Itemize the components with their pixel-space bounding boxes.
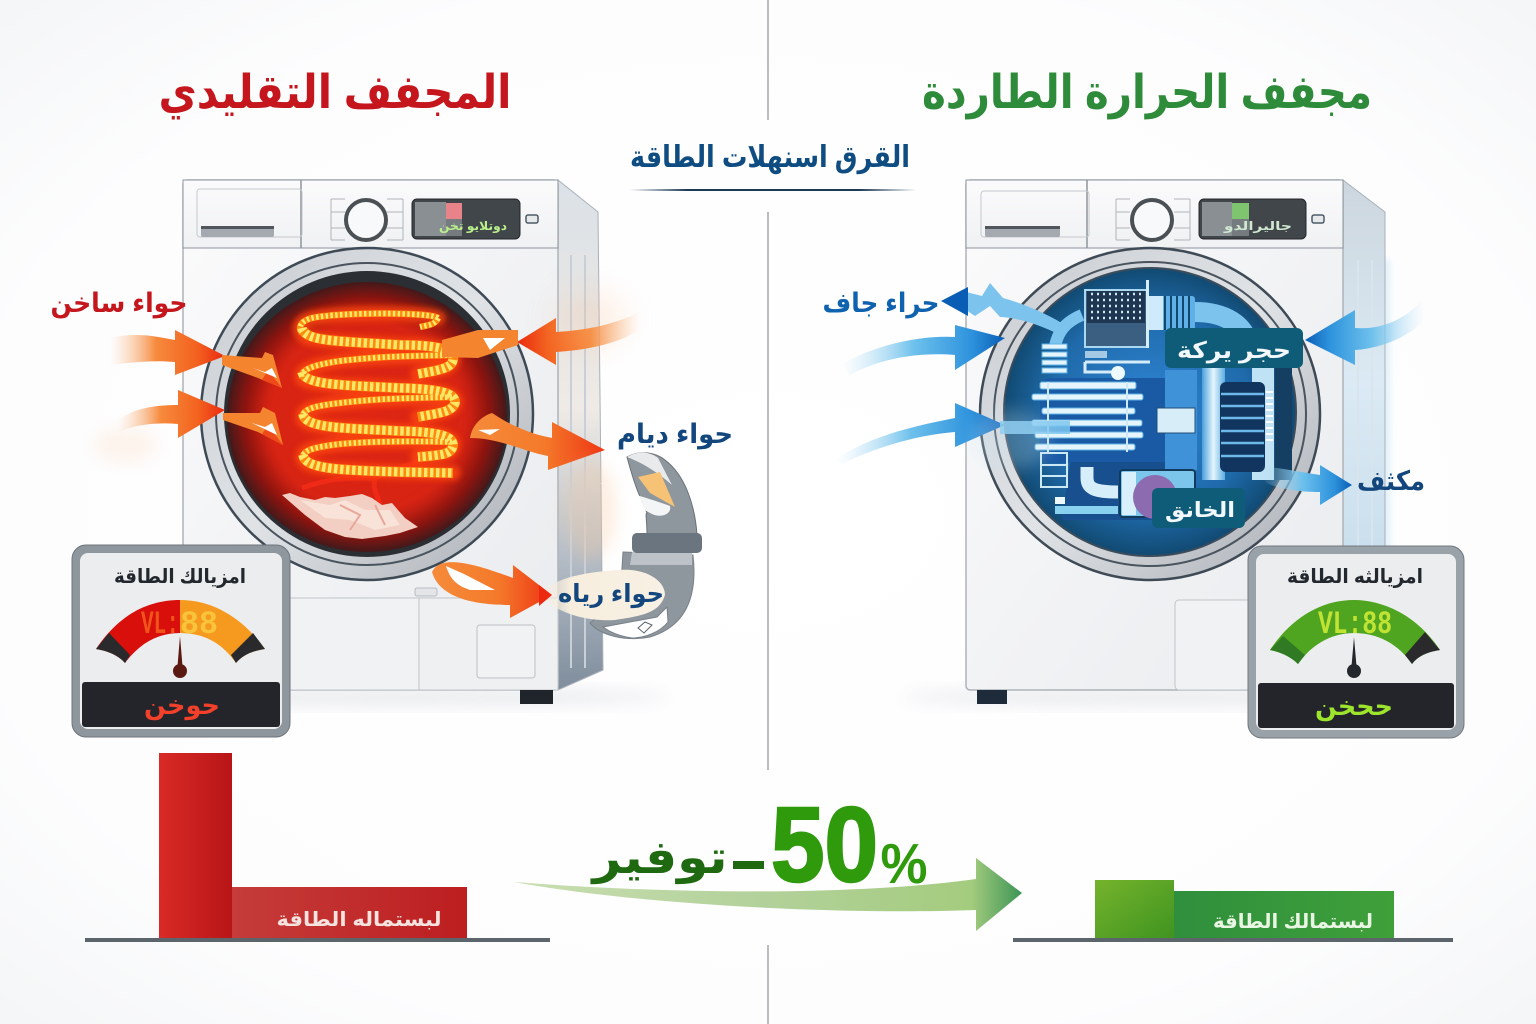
title: heat pump dryer: مجفف الحرارة الطاردة (922, 65, 1372, 120)
energy gauge: heat pump: ححخن (1315, 691, 1393, 722)
gauge title: امزيالثه الطاقة (1287, 566, 1423, 588)
label: hot air: حواء ساخن (50, 288, 188, 319)
door (201, 248, 533, 580)
arrow: condenser out (1262, 465, 1352, 505)
arrow: air in middle (835, 403, 1070, 465)
grille (1085, 280, 1149, 348)
control knob (1116, 199, 1190, 240)
label box: component (1165, 328, 1303, 368)
label: warm air: حواء رياه (558, 580, 664, 609)
energy gauge: traditional (72, 545, 290, 737)
heat exchanger (1032, 344, 1143, 450)
splatter glow (93, 427, 157, 463)
savings callout: 50 (771, 786, 878, 904)
washer body (966, 180, 1385, 704)
bar chart: traditional energy use: لبستماله الطاقة (276, 909, 442, 931)
energy gauge: heat pump (1248, 546, 1464, 738)
arrow: hot air in top (110, 330, 282, 388)
gauge status (82, 682, 280, 727)
title: traditional dryer: المجفف التقليدي (158, 65, 512, 119)
bar chart: heat pump energy use (1013, 880, 1453, 942)
door (980, 248, 1320, 580)
arrow: dry air out (941, 283, 1068, 335)
label: dry air: حراء جاف (822, 288, 940, 319)
label box: compressor (1152, 488, 1245, 528)
display (1199, 199, 1306, 239)
gauge dial (1270, 600, 1440, 678)
heat pump internals (1032, 280, 1292, 520)
label box: component: حجر يركة (1177, 337, 1291, 364)
arrow: air right (1305, 300, 1425, 365)
evaporator coil (1220, 382, 1273, 472)
display: جاليرالدو (1223, 219, 1292, 234)
laundry (282, 493, 418, 539)
savings callout (590, 786, 928, 904)
label box: compressor: الخانق (1165, 499, 1235, 522)
arrow: humid air out (470, 413, 605, 470)
bottom pipes (1087, 467, 1118, 492)
savings callout: % (880, 832, 928, 896)
water splatter (970, 410, 1050, 470)
floor shadow (900, 687, 1440, 707)
label: condenser: مكثف (1357, 466, 1425, 496)
label: humid air: حواء ديام (617, 419, 733, 450)
warm air blob (540, 570, 665, 620)
arrow: air in top (840, 325, 1005, 375)
arrow: savings (514, 858, 1022, 931)
panel: traditional dryer (50, 180, 733, 737)
icon: heating coil (300, 314, 455, 473)
side glow (1345, 260, 1390, 580)
gauge dial: 88 (180, 606, 218, 643)
arrow: air right top (442, 312, 640, 365)
compressor (1120, 470, 1195, 519)
top pipes (1195, 312, 1248, 345)
display (412, 199, 520, 239)
bar chart: heat pump energy use: لبستمالك الطاقة (1213, 911, 1373, 933)
center divider (767, 0, 769, 1024)
icon: exhaust duct (590, 453, 702, 639)
energy gauge: traditional: حوخن (144, 690, 220, 721)
control knob (331, 199, 403, 240)
heading: energy consumption difference: القرق اسنهلات الطاقة (630, 141, 910, 174)
bar chart: traditional energy use (85, 753, 550, 942)
gauge title: امزيالك الطاقة (114, 566, 246, 588)
panel: heat pump dryer (822, 180, 1464, 738)
washer body (183, 180, 603, 704)
gauge dial (96, 600, 265, 678)
savings callout: توفير (590, 831, 728, 884)
machine bed (1040, 378, 1182, 463)
display: دوتلايو تخن (439, 219, 507, 234)
gauge status (1258, 683, 1454, 728)
arrow: hot air in bottom (118, 390, 283, 445)
floor shadow (130, 687, 670, 707)
gauge dial: VL: (141, 606, 179, 643)
arrow: warm air to exhaust (432, 562, 552, 618)
gauge dial: VL:88 (1318, 606, 1392, 643)
